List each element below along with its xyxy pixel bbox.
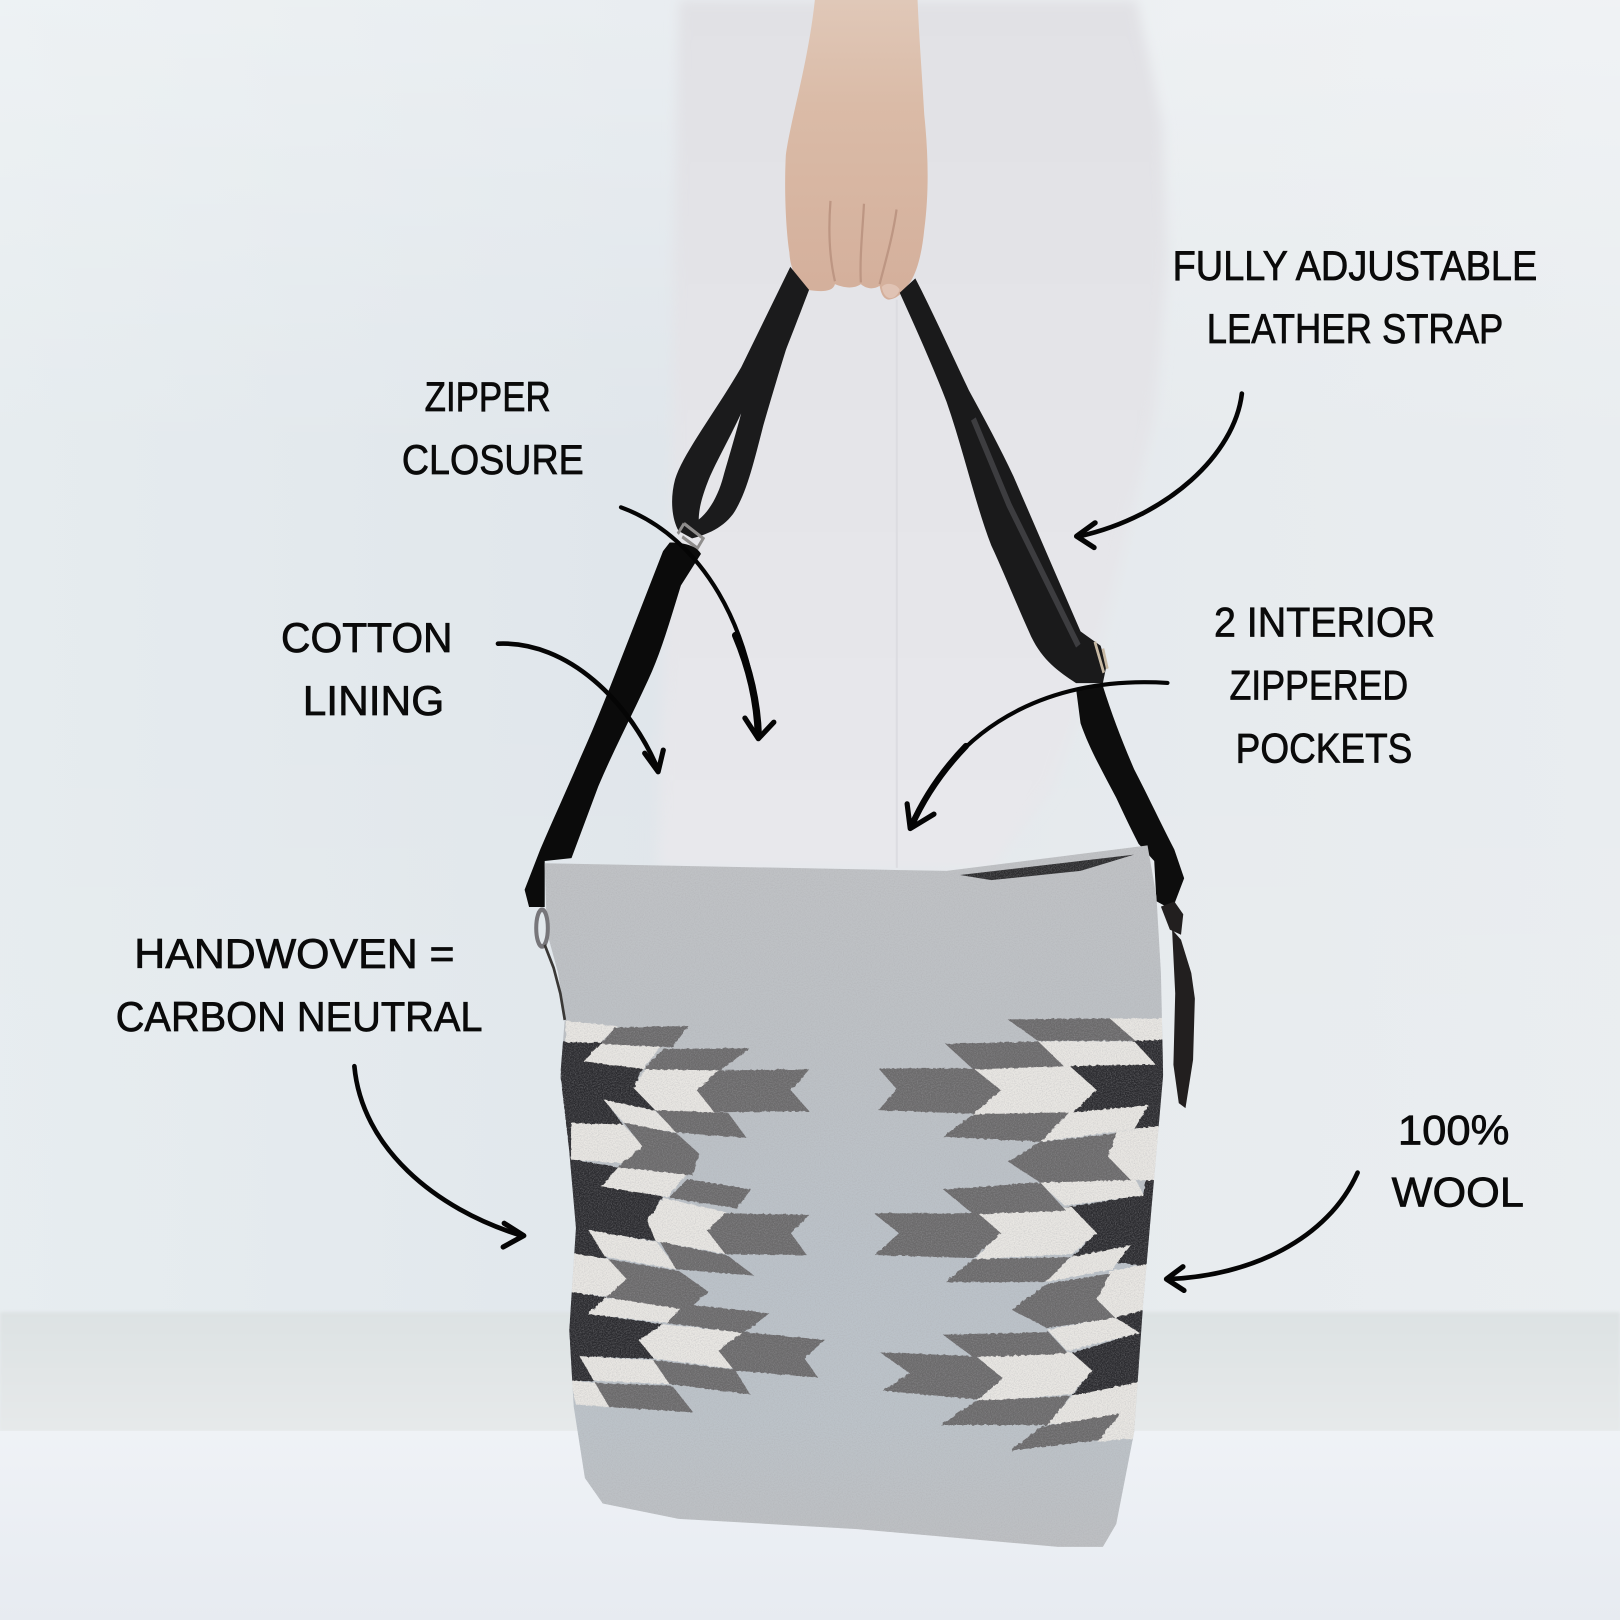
arrow: leather strap xyxy=(1077,394,1242,548)
callout: leather strap: FULLY ADJUSTABLE xyxy=(1173,243,1537,289)
callout: carbon neutral: CARBON NEUTRAL xyxy=(116,994,482,1040)
callout: interior pockets: 2 INTERIOR xyxy=(1214,599,1435,645)
callout: interior pockets xyxy=(1214,599,1435,771)
strap: metal ring xyxy=(678,524,703,548)
strap: buckle xyxy=(1095,642,1107,673)
strap: upper right xyxy=(900,278,1106,683)
callout: wool xyxy=(1392,1108,1524,1216)
callout: zipper closure xyxy=(402,374,584,483)
white linen dress xyxy=(658,0,1167,868)
callout: carbon neutral xyxy=(116,931,482,1040)
strap: inner stripe xyxy=(973,419,1078,646)
arrow: wool xyxy=(1166,1173,1358,1290)
arrow: carbon neutral xyxy=(354,1066,524,1247)
bag: leather zipper pull xyxy=(1161,902,1195,1108)
callout: leather strap: LEATHER STRAP xyxy=(1207,306,1503,352)
callout: cotton lining xyxy=(281,615,453,724)
callout: interior pockets: ZIPPERED xyxy=(1229,662,1408,708)
bag: opening xyxy=(960,855,1134,880)
hand holding the strap xyxy=(785,0,928,300)
pattern: cream left xyxy=(566,1021,743,1407)
arrow: interior pockets xyxy=(907,682,1167,829)
strap: lower left xyxy=(525,542,701,907)
bag: woven chevron pattern xyxy=(560,1019,1165,1450)
callout: cotton lining: COTTON xyxy=(281,615,453,661)
callout: interior pockets: POCKETS xyxy=(1236,725,1412,771)
callout: cotton lining: LINING xyxy=(303,678,444,724)
strap: handle loop xyxy=(672,267,809,538)
pattern: cream right xyxy=(973,1019,1165,1441)
arrow: zipper closure xyxy=(621,507,774,739)
bag: body xyxy=(545,845,1163,1547)
callout: zipper closure: CLOSURE xyxy=(402,437,584,483)
pattern: grey left xyxy=(596,1027,824,1412)
pattern: dark base left xyxy=(560,1042,663,1381)
woven wool bag xyxy=(536,840,1195,1555)
callout: carbon neutral: HANDWOVEN = xyxy=(134,931,455,977)
pattern: dark base right xyxy=(1065,1039,1165,1396)
arrow: cotton lining xyxy=(498,644,663,772)
black leather strap xyxy=(525,267,1184,910)
callout: wool: 100% xyxy=(1398,1108,1509,1154)
strap: lower right xyxy=(1076,686,1184,910)
bag: wool texture xyxy=(545,840,1170,1555)
dress centre seam xyxy=(896,300,898,868)
pattern: grey right xyxy=(875,1019,1134,1450)
callout: wool: WOOL xyxy=(1392,1170,1524,1216)
bag: left ring and seam xyxy=(536,910,565,1020)
callout: leather strap xyxy=(1173,243,1537,352)
callout: zipper closure: ZIPPER xyxy=(425,374,551,420)
